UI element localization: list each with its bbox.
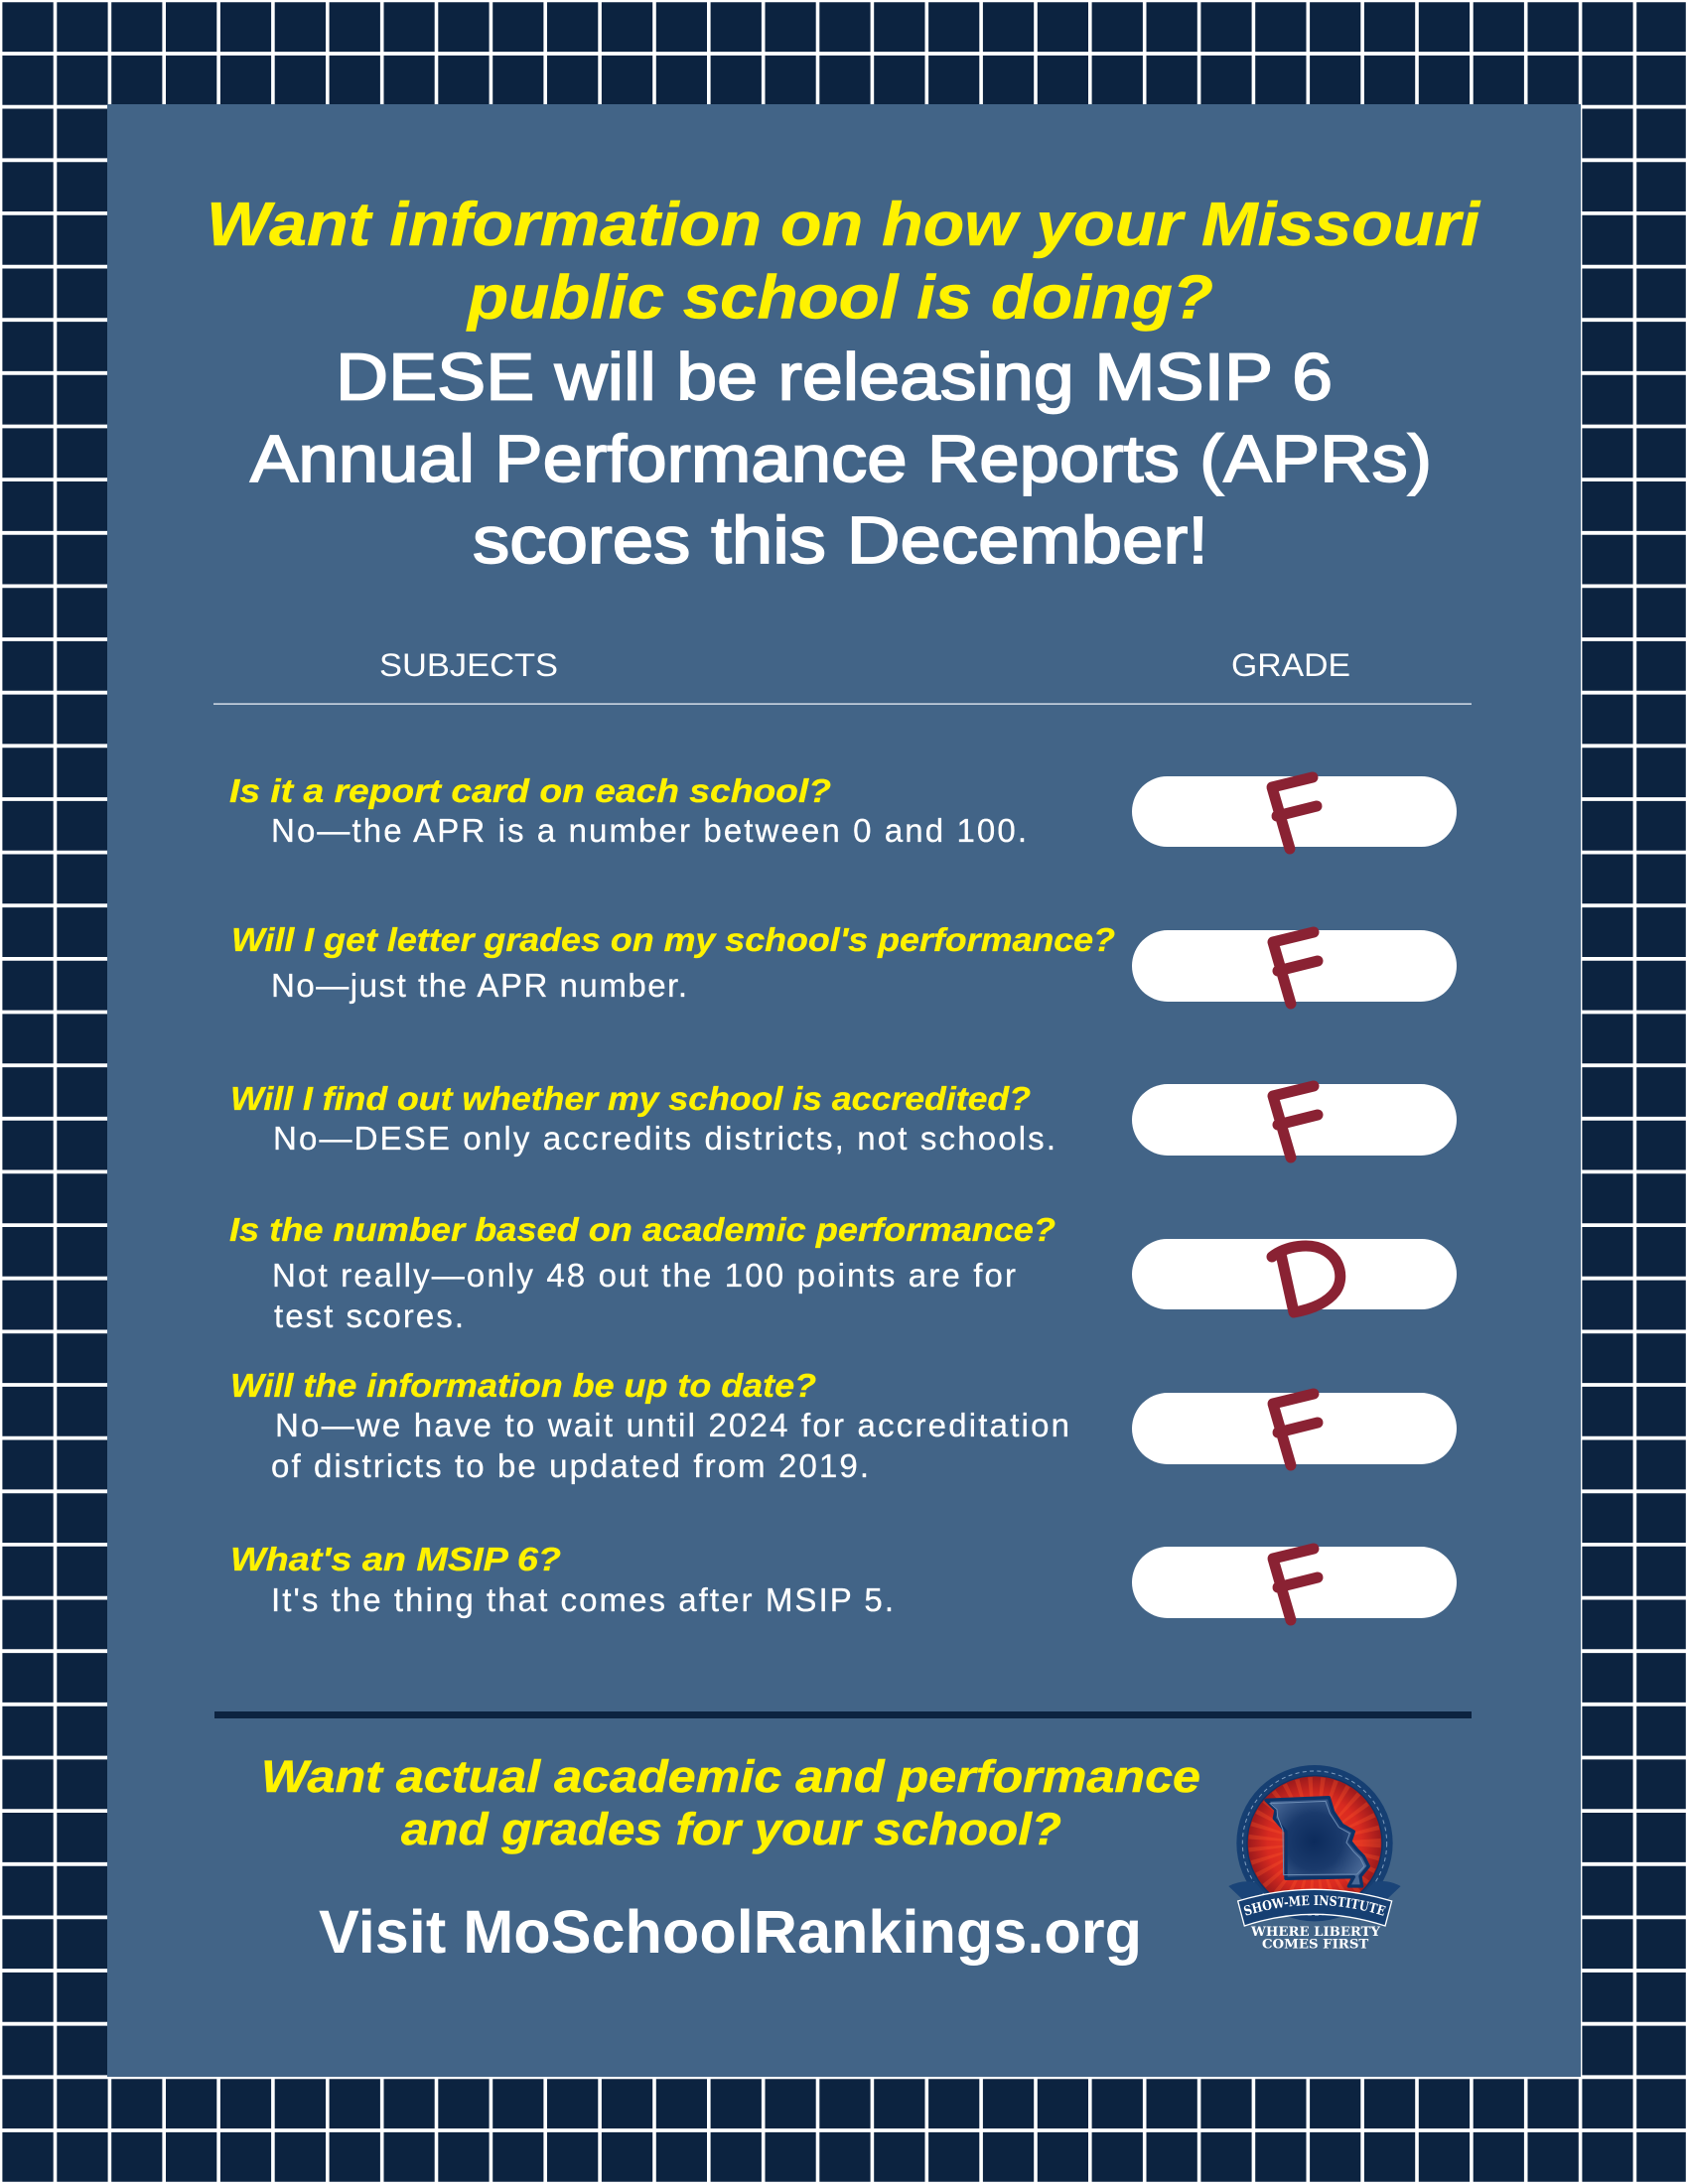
grade pill F — [1132, 776, 1457, 849]
footer call to action: Visit MoSchoolRankings.org — [319, 1898, 1142, 1966]
row 5: up to date — [230, 1367, 1457, 1484]
row 2: letter grades: No—just the APR number. — [271, 967, 687, 1004]
grade pill F — [1132, 1393, 1457, 1465]
row 5: up to date: Will the information be up to date? — [230, 1367, 816, 1404]
row 4: academic performance — [229, 1211, 1457, 1334]
grade pill D — [1132, 1239, 1457, 1312]
row 1: report card — [229, 772, 1457, 849]
row 6: what is MSIP 6: It's the thing that comes after MSIP 5. — [271, 1581, 894, 1618]
grade pill F — [1132, 1084, 1457, 1158]
row 5: up to date: of districts to be updated from 2019. — [271, 1447, 869, 1484]
footer question: and grades for your school? — [401, 1804, 1061, 1854]
footer question: Want actual academic and performance — [261, 1751, 1200, 1802]
subtitle: white announcement — [250, 340, 1432, 578]
row 4: academic performance: test scores. — [274, 1297, 464, 1334]
row 1: report card: No—the APR is a number between 0 and 100. — [271, 812, 1027, 849]
logo tagline — [1250, 1924, 1381, 1951]
logo banner — [1237, 1888, 1392, 1927]
row 3: accreditation: No—DESE only accredits districts, not schools. — [273, 1120, 1055, 1157]
logo banner: SHOW-ME INSTITUTE — [1243, 1895, 1386, 1916]
logo seal ring — [1236, 1765, 1393, 1921]
title: yellow question: public school is doing? — [466, 264, 1213, 332]
header rule — [213, 703, 1472, 705]
row 1: report card: Is it a report card on each school? — [229, 772, 831, 809]
row 3: accreditation: Will I find out whether my school is accredited? — [230, 1080, 1031, 1117]
row 5: up to date: No—we have to wait until 2024 for accreditation — [275, 1407, 1069, 1443]
subtitle: white announcement: DESE will be releasing MSIP 6 — [336, 340, 1333, 415]
title: yellow question — [207, 191, 1481, 332]
row 6: what is MSIP 6 — [230, 1541, 1457, 1620]
logo Missouri state — [1266, 1798, 1368, 1886]
row 4: academic performance: Not really—only 48 out the 100 points are for — [272, 1257, 1016, 1294]
panel: main blue card — [107, 104, 1581, 2077]
subtitle: white announcement: Annual Performance Reports (APRs) — [250, 422, 1432, 496]
footer question — [261, 1751, 1200, 1854]
footer divider — [214, 1711, 1472, 1718]
logo tagline: WHERE LIBERTY — [1250, 1924, 1381, 1939]
logo: Show-Me Institute — [1229, 1765, 1400, 1951]
logo tagline: COMES FIRST — [1262, 1936, 1369, 1951]
row 6: what is MSIP 6: What's an MSIP 6? — [230, 1541, 561, 1577]
row 2: letter grades — [231, 921, 1457, 1004]
subtitle: white announcement: scores this December! — [473, 503, 1208, 578]
row 3: accreditation — [230, 1080, 1457, 1158]
table header: subjects: SUBJECTS — [379, 647, 558, 683]
title: yellow question: Want information on how your Missouri — [207, 191, 1481, 259]
table header: grade: GRADE — [1231, 647, 1350, 683]
grade pill F — [1132, 1547, 1457, 1620]
row 4: academic performance: Is the number based on academic performance? — [229, 1211, 1055, 1248]
grade pill F — [1132, 930, 1457, 1004]
row 2: letter grades: Will I get letter grades on my school's performance? — [231, 921, 1115, 958]
logo ribbon tails — [1228, 1881, 1401, 1900]
